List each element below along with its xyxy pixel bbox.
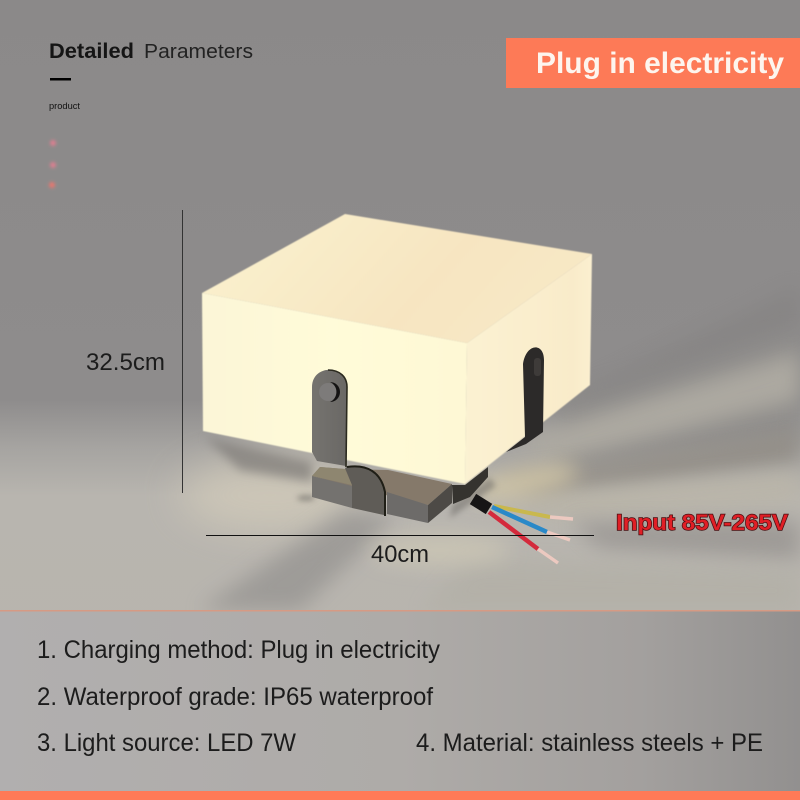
shade right face [465,254,592,484]
width label: 40cm [371,541,429,568]
shade left face [202,293,467,484]
wire: blue [492,507,547,532]
header accent bar [50,78,71,80]
cable housing [452,467,488,504]
right bracket [506,347,544,452]
width dimension line [206,534,594,536]
bracket screw [534,358,541,376]
lamp base [312,466,488,523]
left bracket [312,370,347,467]
divider line [0,610,800,612]
badge: plug in electricity [506,38,800,88]
header title [49,40,253,63]
badge: plug in electricity: Plug in electricity [536,47,784,80]
spec list [37,636,763,757]
input voltage label: Input 85V-265V [616,510,788,535]
bracket screw [319,383,337,401]
faint pink dots [49,140,56,188]
bottom specs panel background [0,611,800,791]
height dimension line [182,210,184,493]
floor light and shadow streaks [180,285,800,612]
height label: 32.5cm [86,349,165,376]
wire: yellow [494,506,550,517]
header title: Parameters [144,41,253,63]
lamp shade [202,214,592,484]
base plate top [312,467,452,505]
spec 4: 4. Material: stainless steels + PE [416,729,763,757]
bottom orange band [0,791,800,800]
product label: product [49,101,80,112]
curved bracket foot [345,466,384,515]
power cable [473,499,573,563]
header title: Detailed [49,40,134,63]
base plate front [312,476,352,508]
spec 2: 2. Waterproof grade: IP65 waterproof [37,683,433,711]
spec 1: 1. Charging method: Plug in electricity [37,636,440,664]
shade top face [202,214,592,343]
wire: red [489,512,538,549]
spec 3: 3. Light source: LED 7W [37,729,296,757]
